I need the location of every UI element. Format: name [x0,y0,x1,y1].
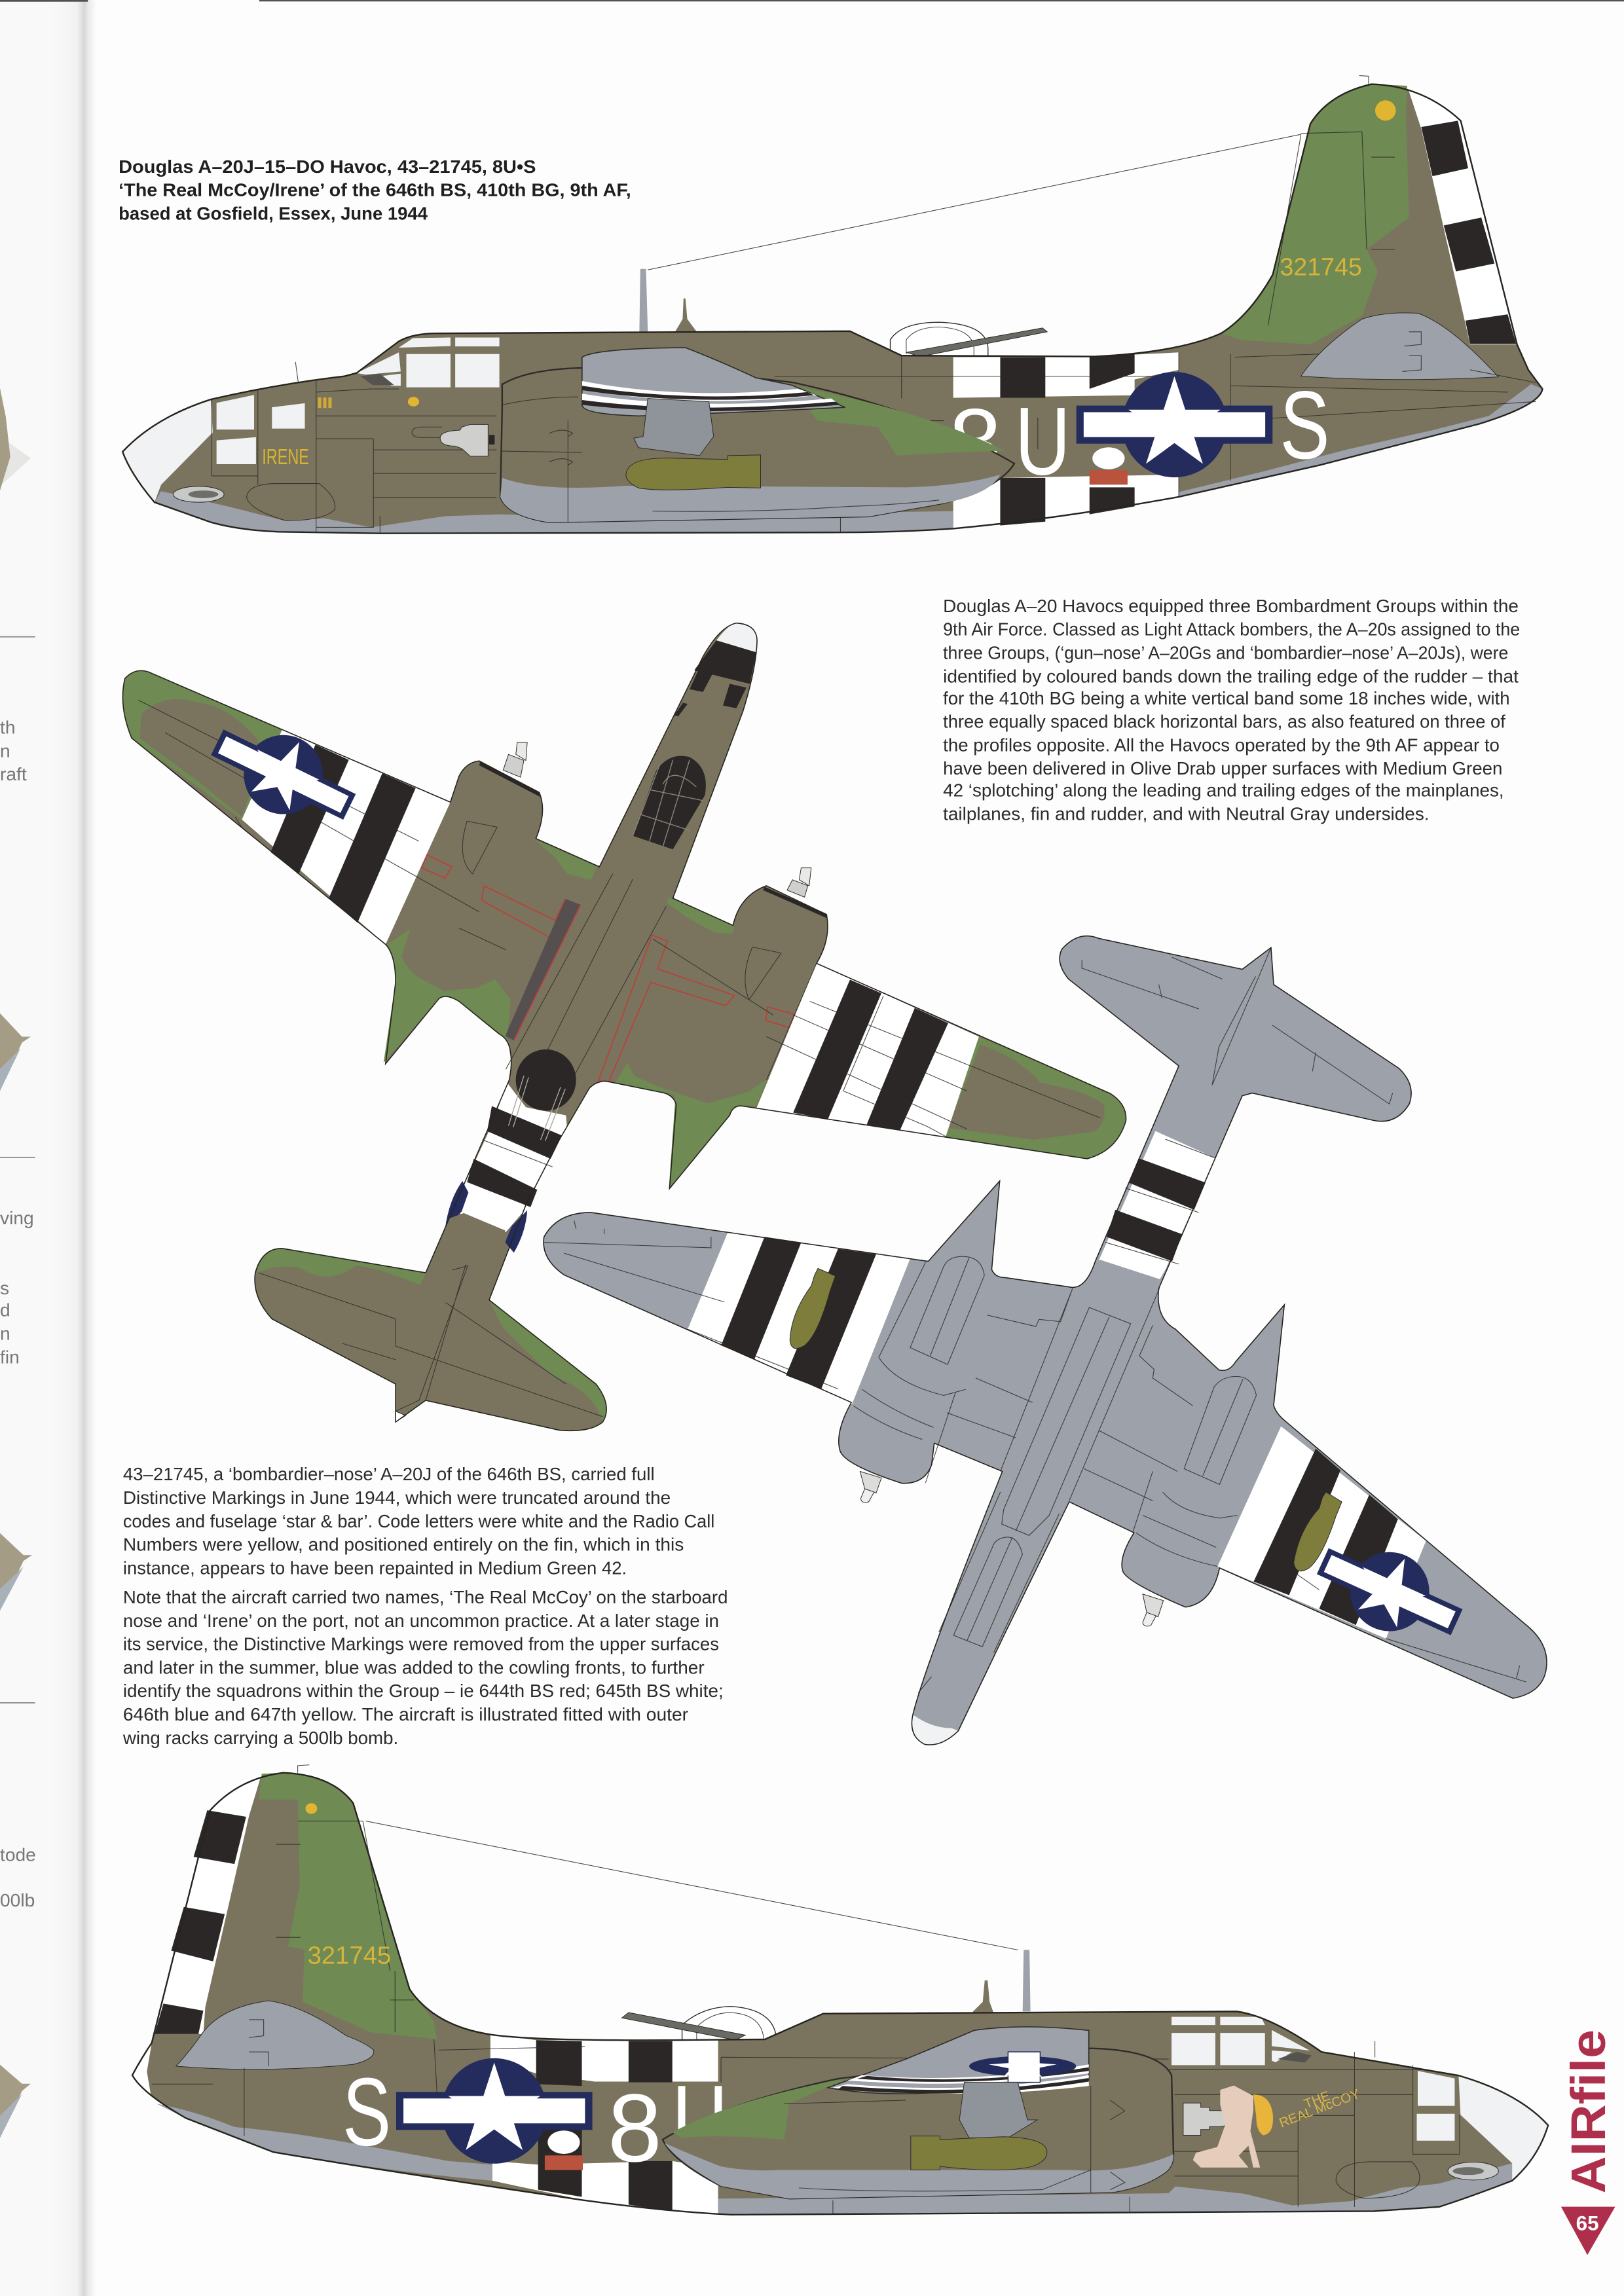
aircraft: underside plan view [544,936,1547,1745]
text block: aircraft notes: codes and fuselage ‘star & bar’. Code letters were white and the Radio Call [123,1510,714,1531]
title: aircraft caption: Douglas A–20J–15–DO Havoc, 43–21745, 8U•S [119,156,536,177]
aerial wire and masts [295,75,1369,382]
text block: history: three Groups, (‘gun–nose’ A–20Gs and ‘bombardier–nose’ A–20Js), were [943,642,1508,663]
code letters and insignia panel [262,253,1362,497]
page number badge [1561,2207,1615,2255]
port nacelle, wing and bomb [663,2027,1273,2198]
code letters and insignia panel: 8 [949,389,1002,497]
left page bleed: cropped neighbouring page: tode [0,1844,36,1865]
text block: history: tailplanes, fin and rudder, and with Neutral Gray undersides. [943,803,1430,824]
left page bleed: cropped neighbouring page: ving [0,1207,34,1228]
panel lines [544,947,1526,1693]
fin yellow dot [306,1803,317,1814]
code letters and insignia panel: 321745 [308,1942,391,1969]
rudder band [155,1774,262,2034]
text block: aircraft notes: 646th blue and 647th yellow. The aircraft is illustrated fitted with outer [123,1704,688,1724]
text block: aircraft notes: 43–21745, a ‘bombardier–nose’ A–20J of the 646th BS, carried full [123,1463,655,1484]
spinner [440,424,488,456]
wing insignia [969,2052,1076,2083]
left page bleed: cropped neighbouring page: th [0,717,15,738]
wing upper surface grey [582,348,845,416]
aerial wire and masts [298,1765,1375,2057]
fuselage, fin and rudder [132,1773,1548,2215]
starboard nacelle, wing and bomb [440,348,1014,522]
text block: history: 9th Air Force. Classed as Light Attack bombers, the A–20s assigned to the [943,619,1520,640]
code letters and insignia panel: 321745 [1280,253,1362,281]
text block: aircraft notes [122,1463,728,1748]
nose oval window [1448,2162,1498,2180]
aircraft: port side profile [122,75,1542,534]
spinner [1183,2103,1232,2136]
aircraft: upper surface plan view [122,623,1126,1430]
text block: history: identified by coloured bands down the trailing edge of the rudder – that [943,665,1519,686]
left page bleed: cropped neighbouring page: n [0,740,10,761]
underside grey [155,491,953,534]
nose oval window [174,486,224,502]
tailplane grey [176,2001,374,2069]
bomb rack [634,399,714,456]
text block: history: the profiles opposite. All the Havocs operated by the 9th AF appear to [943,734,1500,755]
text block: aircraft notes: instance, appears to have been repainted in Medium Green 42. [123,1557,627,1578]
airframe outline [544,936,1547,1745]
fin yellow dot [1375,100,1396,120]
text block: aircraft notes: identify the squadrons within the Group – ie 644th BS red; 645th BS white; [123,1680,724,1701]
title: aircraft caption: based at Gosfield, Essex, June 1944 [119,202,428,223]
fuselage invasion stripes upper [953,352,1179,398]
fuselage panel lines [212,352,1536,534]
wing bomb port [790,1268,836,1349]
text block: history [943,595,1520,824]
nose and cockpit glazing [716,623,757,652]
port wing invasion stripes [242,730,451,944]
port wing invasion stripes [688,1233,910,1404]
fin green [1221,84,1409,344]
starboard wing invasion stripes [1217,1427,1426,1639]
bomb bay and hatch lines [505,899,581,1040]
outline: port profile [122,84,1542,534]
fin green [259,1773,437,2039]
insignia: lower wing star and bar [1306,1525,1473,1658]
code letters and insignia panel: U [1015,388,1071,496]
page number badge: 65 [1576,2212,1598,2234]
tailplane camouflage [257,1248,426,1285]
starboard wing tip camouflage [946,1036,1126,1159]
airframe outline [122,623,1126,1430]
propeller spinners [503,742,811,897]
rudder band [1407,86,1517,344]
bomb rack [959,2083,1037,2138]
fuselage invasion stripes lower [492,2161,718,2215]
text block: history: for the 410th BG being a white vertical band some 18 inches wide, with [943,687,1510,708]
rear fuselage stripes [1098,1131,1215,1287]
fuselage invasion stripes lower [953,475,1179,528]
cockpit canopy [1172,2017,1215,2025]
text block: history: Douglas A–20 Havocs equipped three Bombardment Groups within the [943,595,1519,616]
title: aircraft caption: ‘The Real McCoy/Irene’ of the 646th BS, 410th BG, 9th AF, [119,179,631,200]
text block: history: three equally spaced black horizontal bars, as also featured on three of [943,711,1505,732]
nose glazing [1458,2075,1548,2181]
bomb [911,2136,1047,2170]
nose name: The: THE [1302,2088,1332,2111]
dorsal turret and gun [891,322,1047,357]
inner wing camouflage [384,929,511,1063]
left page bleed: cropped neighbouring page: 00lb [0,1889,35,1910]
code letters and insignia panel: S [1280,371,1330,479]
left page bleed: cropped neighbouring page: n [0,1322,10,1343]
left page bleed: cropped neighbouring page: raft [0,763,27,784]
text block: history: have been delivered in Olive Drab upper surfaces with Medium Green [943,757,1502,778]
starboard wing invasion stripes [756,963,979,1137]
nose yellow marks [318,397,419,408]
code letters and insignia panel: U [672,2066,728,2174]
left page bleed: cropped neighbouring page: s [0,1277,9,1298]
fuselage invasion stripes upper [490,2034,718,2082]
text block: aircraft notes: nose and ‘Irene’ on the port, not an uncommon practice. At a later stage in [123,1610,719,1631]
nose art figure [1193,2086,1273,2168]
tailplane grey [1301,313,1498,380]
propeller spinners [860,1471,1164,1626]
text block: aircraft notes: Note that the aircraft carried two names, ‘The Real McCoy’ on the starboard [123,1586,728,1607]
left page bleed: cropped neighbouring page: fin [0,1346,20,1367]
wing bomb starboard [1294,1492,1342,1571]
title: aircraft caption [119,156,631,223]
code letters and insignia panel: 8 [608,2074,662,2182]
engine cowl fronts [763,887,827,919]
text block: aircraft notes: Numbers were yellow, and positioned entirely on the fin, which in this [123,1534,684,1555]
nose glazing [912,1715,958,1745]
aircraft: starboard side profile [132,1765,1548,2215]
nose name: Real McCoy: REAL McCOY [1278,2086,1362,2130]
cockpit canopy [399,338,451,348]
dorsal turret and gun [621,2007,777,2043]
text block: aircraft notes: and later in the summer, blue was added to the cowling fronts, to further [123,1656,705,1677]
text block: history: 42 ‘splotching’ along the leading and trailing edges of the mainplanes, [943,780,1504,801]
fuselage, fin and rudder [122,84,1542,534]
port wing tip camouflage [122,670,282,820]
bomb [626,455,761,490]
wing grey [828,2027,1089,2094]
left page bleed: cropped neighbouring page [0,388,36,2138]
code letters and insignia panel [308,1942,728,2182]
logo: AIRfile: AIRfile [1561,2030,1615,2193]
text block: aircraft notes: Distinctive Markings in June 1944, which were truncated around the [123,1487,671,1508]
rear fuselage stripes [452,1083,567,1232]
code letters and insignia panel: S [342,2058,391,2166]
code letters and insignia panel: IRENE [262,445,309,469]
airframe outline fill [122,623,1126,1430]
outline: starboard profile [132,1773,1548,2215]
panel lines [138,700,1101,1417]
underside grey [157,2104,492,2181]
insignia: upper wing star and bar [200,707,367,843]
text block: aircraft notes: its service, the Distinctive Markings were removed from the upper surfaces [123,1633,719,1654]
left page bleed: cropped neighbouring page: d [0,1300,10,1321]
airframe grey fill [544,936,1547,1745]
text block: aircraft notes: wing racks carrying a 500lb bomb. [122,1727,398,1748]
rear turret [516,1049,576,1111]
nose glazing [122,399,213,502]
